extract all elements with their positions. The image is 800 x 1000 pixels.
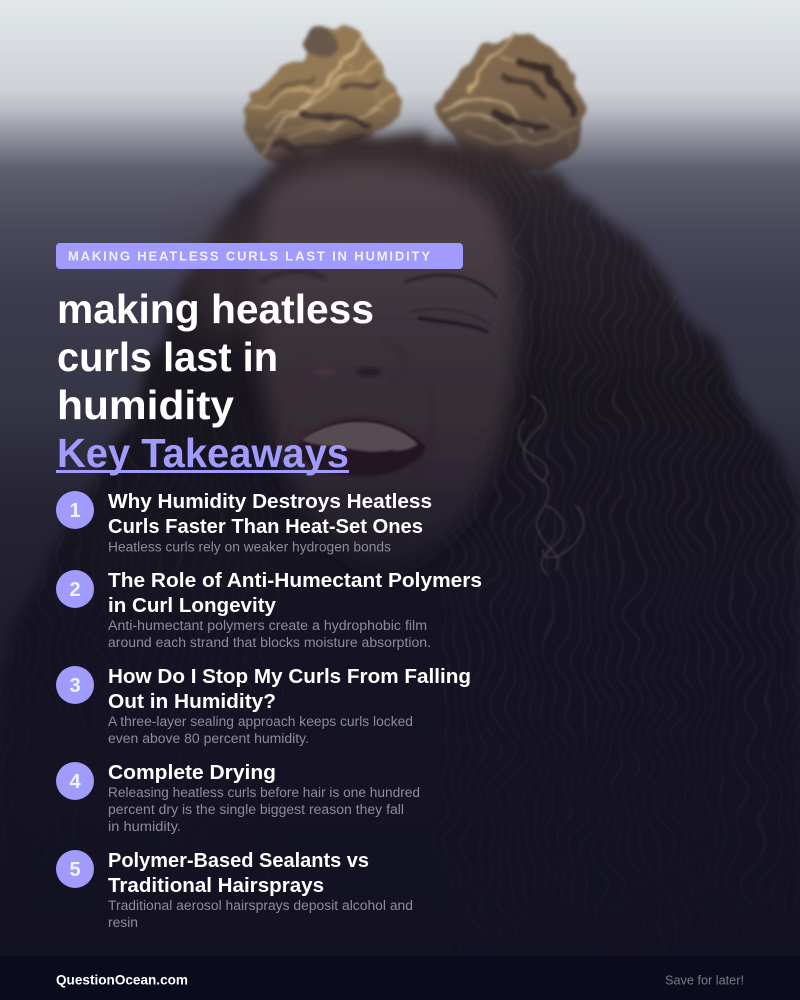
takeaway 2 <box>56 570 482 650</box>
takeaway 2: The Role of Anti-Humectant Polymers <box>108 570 482 592</box>
takeaway 1: Why Humidity Destroys Heatless <box>108 491 432 513</box>
takeaway 4: Complete Drying <box>108 762 276 784</box>
takeaway 4: percent dry is the single biggest reason they fall <box>108 802 404 817</box>
footer brand: QuestionOcean.com <box>56 972 188 988</box>
takeaway 4: in humidity. <box>108 819 181 834</box>
takeaway 1: Heatless curls rely on weaker hydrogen bonds <box>108 540 391 554</box>
takeaway 5: resin <box>108 915 138 930</box>
takeaway 3: How Do I Stop My Curls From Falling <box>108 666 471 688</box>
hair mass <box>5 124 800 726</box>
footer bar <box>0 956 800 1000</box>
tag pill: MAKING HEATLESS CURLS LAST IN HUMIDITY <box>68 248 430 264</box>
footer save note: Save for later! <box>665 972 744 988</box>
right hair bun <box>435 35 584 172</box>
takeaway 1 <box>56 491 432 554</box>
takeaway 1: 1 <box>69 500 81 522</box>
takeaway 3 <box>56 666 471 746</box>
subtitle: key takeaways: Key Takeaways <box>57 430 349 476</box>
left hair bun <box>244 25 401 161</box>
face <box>253 162 517 572</box>
takeaway 5: 5 <box>69 859 81 881</box>
title: humidity <box>57 382 234 428</box>
takeaway 5: Traditional Hairsprays <box>108 875 324 897</box>
takeaway 2: in Curl Longevity <box>108 595 277 617</box>
takeaway 3: Out in Humidity? <box>108 691 276 713</box>
takeaway 3: 3 <box>69 675 81 697</box>
takeaway 2: Anti-humectant polymers create a hydrophobic film <box>108 618 427 633</box>
takeaway 2: 2 <box>69 579 81 601</box>
takeaway 5 <box>56 850 413 930</box>
title: making heatless <box>57 286 374 332</box>
takeaway 5: Traditional aerosol hairsprays deposit alcohol and <box>108 898 413 913</box>
takeaway 4: 4 <box>69 771 81 793</box>
takeaway 5: Polymer-Based Sealants vs <box>108 850 369 872</box>
title <box>56 286 374 476</box>
takeaway 4 <box>56 762 420 834</box>
takeaway 3: A three-layer sealing approach keeps curls locked <box>108 714 413 729</box>
takeaway 1: Curls Faster Than Heat-Set Ones <box>108 516 423 538</box>
title: curls last in <box>57 334 278 380</box>
takeaway 4: Releasing heatless curls before hair is one hundred <box>108 785 420 800</box>
takeaway 3: even above 80 percent humidity. <box>108 731 309 746</box>
takeaway 2: around each strand that blocks moisture absorption. <box>108 635 431 650</box>
tag pill <box>56 243 463 269</box>
